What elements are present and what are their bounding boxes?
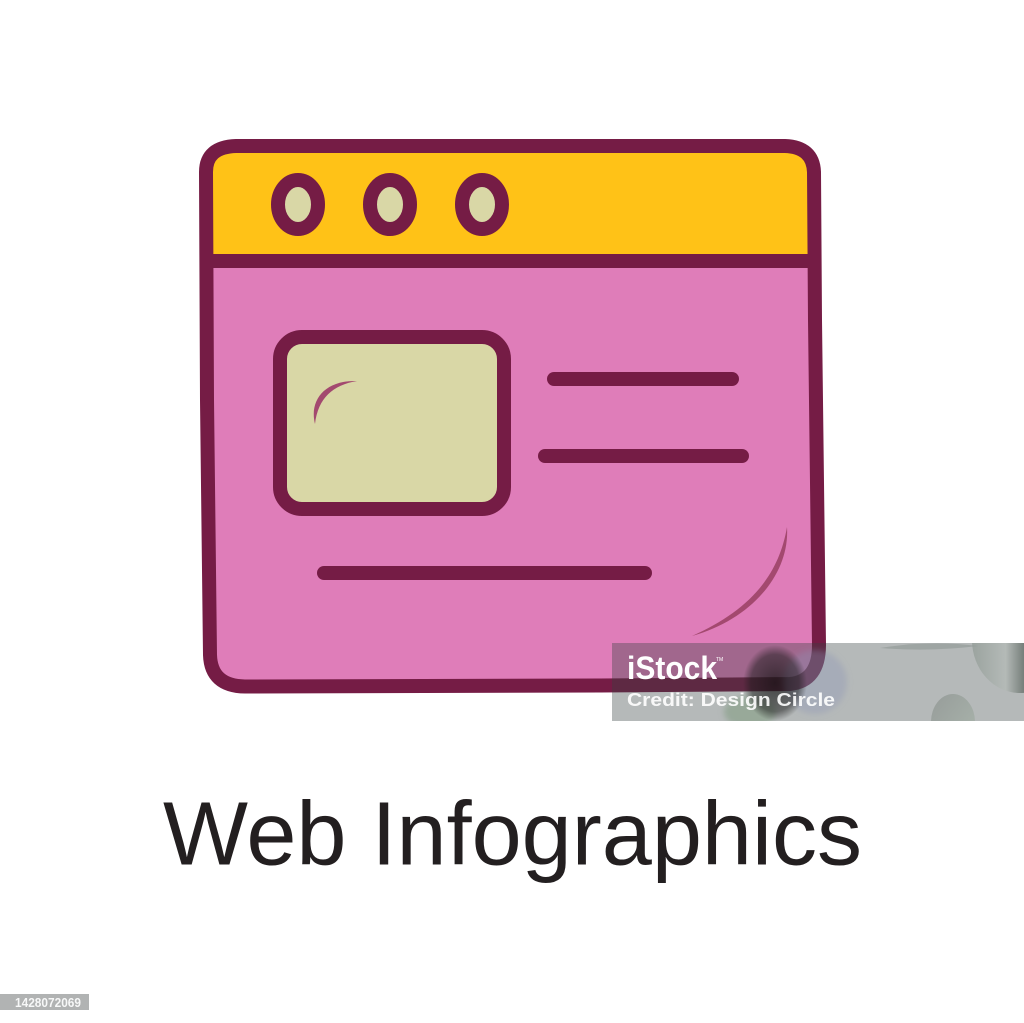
icon: browser window (206, 146, 819, 686)
text line 3 (317, 566, 652, 580)
window button 2 (370, 180, 410, 229)
title: Web Infographics (163, 784, 862, 884)
image highlight (314, 381, 357, 424)
text line 1 (547, 372, 739, 386)
title bar divider (208, 254, 814, 268)
window outline (206, 146, 819, 686)
title bar (206, 146, 814, 261)
blob: green haze (722, 694, 776, 721)
banner blobs (722, 643, 1024, 721)
window button 3 (462, 180, 502, 229)
trademark: TM (716, 657, 723, 663)
blob: top right (972, 643, 1024, 693)
image ID: 1428072069 (15, 995, 81, 1010)
banner background (612, 643, 1024, 721)
iStock logo: iStock (627, 650, 717, 686)
blob: blue haze (783, 650, 847, 714)
image ID badge (0, 994, 89, 1010)
blob: dark circle (743, 645, 807, 721)
credit line: Credit: Design Circle (627, 690, 835, 710)
badge background (0, 994, 89, 1010)
watermark: credit banner (612, 643, 1024, 721)
window body (208, 262, 819, 686)
corner highlight (692, 527, 787, 636)
window button 1 (278, 180, 318, 229)
blob: top streak (880, 643, 978, 650)
text line 2 (538, 449, 749, 463)
blob: bottom right (931, 694, 975, 721)
image placeholder (280, 337, 504, 509)
